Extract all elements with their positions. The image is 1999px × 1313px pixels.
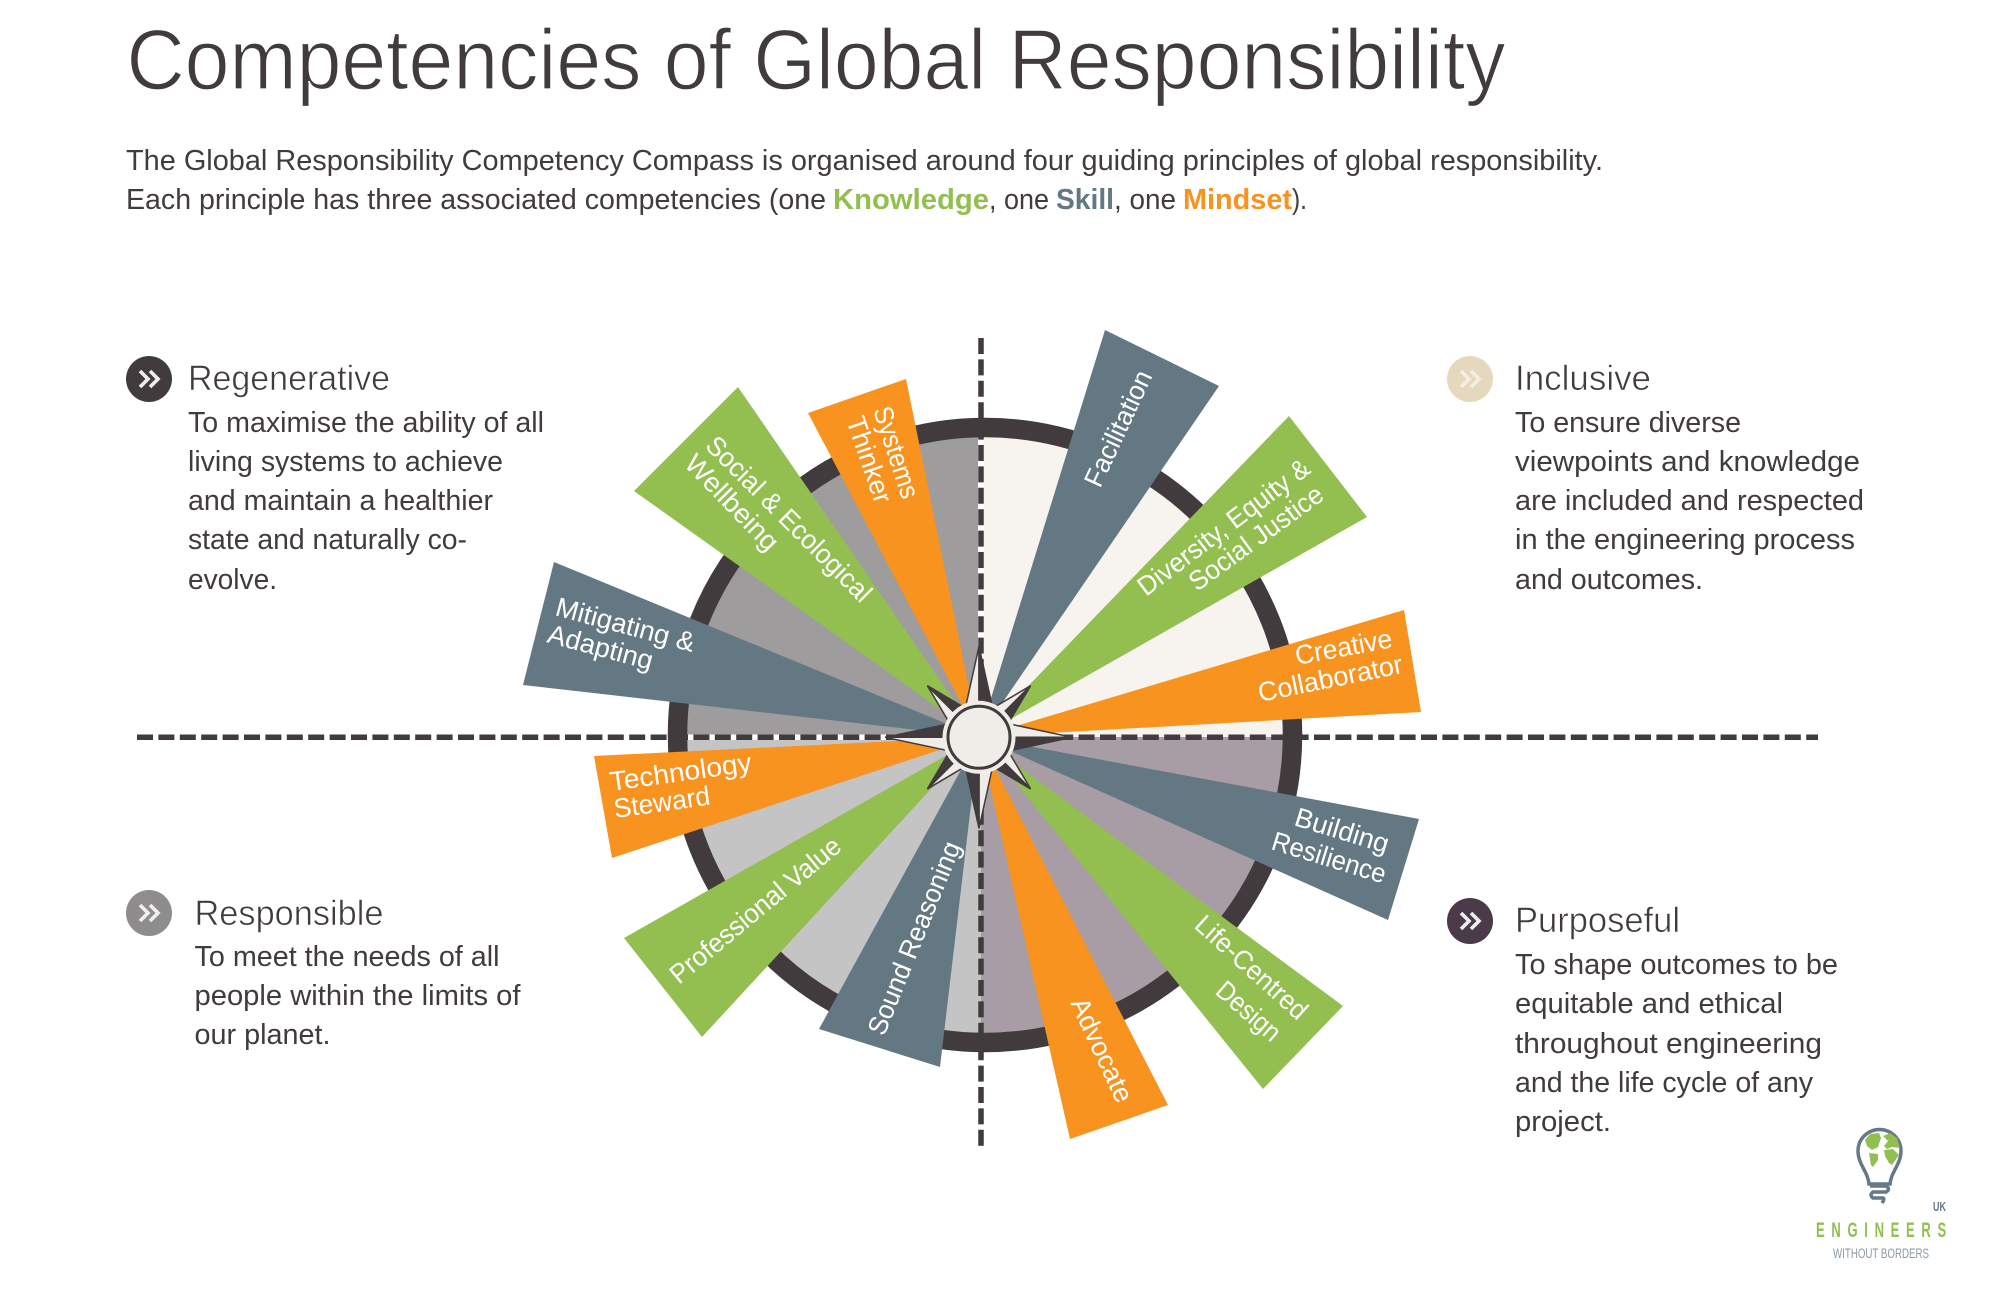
wedge: Creative Collaborator bbox=[979, 610, 1421, 737]
text: Regenerative description: living systems to achieve bbox=[188, 446, 503, 478]
wedge: Sound Reasoning: Sound Reasoning bbox=[862, 837, 967, 1039]
compass disc quadrants bbox=[687, 437, 1283, 1033]
intro paragraph: , one bbox=[989, 184, 1049, 216]
axis dashed lines bbox=[137, 338, 1818, 1146]
text: Regenerative description bbox=[188, 407, 544, 596]
text: Responsible description bbox=[194, 941, 521, 1051]
text: Responsible description: our planet. bbox=[194, 1019, 330, 1051]
text: Regenerative description: state and naturally co- bbox=[188, 524, 467, 556]
panel: Inclusive bbox=[1447, 356, 1864, 596]
text: Purposeful description: equitable and ethical bbox=[1515, 988, 1783, 1020]
wedge: Professional Value bbox=[624, 737, 979, 1037]
intro paragraph: The Global Responsibility Competency Compass is organised around four guiding principles of global responsibility. bbox=[126, 145, 1603, 177]
text: Inclusive description: To ensure diverse bbox=[1515, 407, 1741, 439]
heading: Regenerative: Regenerative bbox=[188, 359, 390, 398]
panel: Purposeful bbox=[1447, 898, 1838, 1138]
wedge: Life-Centred Design: Design bbox=[1210, 975, 1287, 1047]
text: ENGINEERS: ENGINEERS bbox=[1816, 1218, 1946, 1242]
text: Purposeful description: and the life cycle of any bbox=[1515, 1067, 1813, 1099]
title: Competencies of Global Responsibility bbox=[126, 13, 1506, 108]
wedge: Advocate bbox=[979, 737, 1168, 1139]
icon: Responsible chevrons bbox=[126, 890, 172, 936]
text: Inclusive description: are included and respected bbox=[1515, 485, 1864, 517]
icon: Purposeful chevrons bbox=[1447, 898, 1493, 944]
wedge: Life-Centred Design bbox=[979, 737, 1343, 1089]
heading: Inclusive: Inclusive bbox=[1515, 359, 1651, 398]
wedge: Technology Steward: Technology bbox=[608, 747, 754, 797]
wedge: Building Resilience: Resilience bbox=[1268, 826, 1390, 889]
wedge: Systems Thinker bbox=[808, 379, 979, 737]
wedge: Diversity, Equity and Social Justice bbox=[979, 416, 1367, 737]
wedge: Technology Steward: Steward bbox=[612, 781, 712, 824]
wedge: Social and Ecological Wellbeing: Social & Ecological bbox=[700, 430, 878, 608]
logo: Engineers Without Borders UK bbox=[1816, 1130, 1946, 1261]
intro paragraph: Each principle has three associated competencies (one bbox=[126, 184, 826, 216]
wedge: Mitigating and Adapting: Adapting bbox=[544, 619, 657, 676]
wedge: Technology Steward bbox=[594, 737, 979, 858]
compass outer ring bbox=[678, 428, 1292, 1042]
text: Inclusive description bbox=[1515, 407, 1864, 596]
text: Inclusive description: and outcomes. bbox=[1515, 564, 1703, 596]
wedge: Creative Collaborator: Creative bbox=[1293, 624, 1394, 671]
text: Purposeful description: throughout engineering bbox=[1515, 1028, 1822, 1060]
text: WITHOUT BORDERS: WITHOUT BORDERS bbox=[1833, 1246, 1929, 1261]
wedge: Creative Collaborator: Collaborator bbox=[1255, 649, 1405, 708]
wedge: Social and Ecological Wellbeing: Wellbeing bbox=[679, 448, 785, 557]
heading: Purposeful: Purposeful bbox=[1515, 901, 1680, 940]
wedge: Professional Value: Professional Value bbox=[664, 831, 847, 990]
text: Inclusive description: viewpoints and knowledge bbox=[1515, 446, 1860, 478]
text: Purposeful description: To shape outcomes to be bbox=[1515, 949, 1838, 981]
text: UK: UK bbox=[1933, 1199, 1946, 1214]
text: Regenerative description: and maintain a healthier bbox=[188, 485, 493, 517]
wedge: Mitigating and Adapting bbox=[523, 562, 979, 737]
wedge: Building Resilience: Building bbox=[1291, 802, 1393, 859]
heading: Responsible: Responsible bbox=[194, 894, 384, 933]
compass star bbox=[885, 646, 1072, 828]
intro paragraph: , one bbox=[1114, 184, 1176, 216]
wedge: Building Resilience bbox=[979, 737, 1419, 920]
intro paragraph: ). bbox=[1292, 184, 1307, 216]
wedge: Systems Thinker: Systems bbox=[867, 403, 925, 502]
icon: Inclusive chevrons bbox=[1447, 356, 1493, 402]
wedge: Facilitation: Facilitation bbox=[1078, 366, 1158, 492]
panel: Responsible bbox=[126, 890, 521, 1051]
wedge: Facilitation bbox=[979, 330, 1219, 737]
wedge: Diversity, Equity and Social Justice: Social Justice bbox=[1183, 479, 1329, 597]
intro paragraph: Mindset bbox=[1183, 184, 1292, 216]
text: Regenerative description: To maximise the ability of all bbox=[188, 407, 544, 439]
wedge: Sound Reasoning bbox=[819, 737, 979, 1067]
wedge: Social and Ecological Wellbeing bbox=[634, 387, 979, 737]
wedge: Life-Centred Design: Life-Centred bbox=[1189, 909, 1314, 1026]
text: Regenerative description: evolve. bbox=[188, 564, 277, 596]
wedge: Systems Thinker: Thinker bbox=[840, 412, 898, 507]
intro paragraph: Knowledge bbox=[833, 184, 989, 216]
wedge: Diversity, Equity and Social Justice: Diversity, Equity & bbox=[1132, 453, 1316, 602]
text: Purposeful description bbox=[1515, 949, 1838, 1138]
text: Responsible description: To meet the needs of all bbox=[194, 941, 500, 973]
text: Purposeful description: project. bbox=[1515, 1106, 1611, 1138]
wedge: Mitigating and Adapting: Mitigating & bbox=[552, 592, 698, 658]
intro paragraph bbox=[126, 145, 1603, 216]
icon: Regenerative chevrons bbox=[126, 356, 172, 402]
intro paragraph: Skill bbox=[1056, 184, 1114, 216]
panel: Regenerative bbox=[126, 356, 544, 596]
icon: light bulb globe bbox=[1858, 1130, 1901, 1203]
text: Responsible description: people within the limits of bbox=[194, 980, 521, 1012]
wedge: Advocate: Advocate bbox=[1065, 993, 1139, 1107]
text: Inclusive description: in the engineering process bbox=[1515, 524, 1855, 556]
